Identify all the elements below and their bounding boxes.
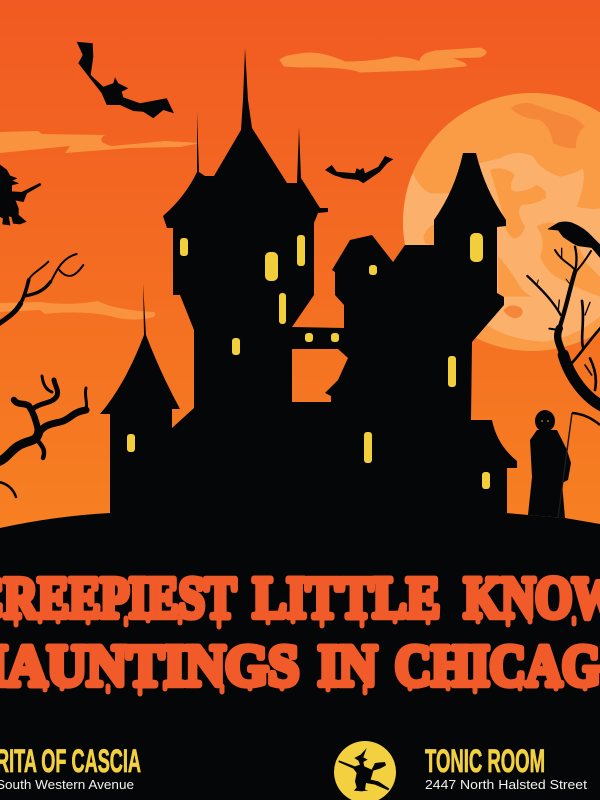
moon mid blobs (490, 168, 546, 238)
reaper eyes (541, 420, 543, 422)
small bat (325, 156, 393, 183)
venue name: RITA OF CASCIA (0, 743, 141, 779)
moon light patches (400, 153, 600, 342)
crow (548, 222, 600, 259)
tree branch: lower left (0, 376, 87, 497)
grim reaper (528, 410, 600, 518)
moon (400, 90, 600, 355)
cloud: lower left (0, 301, 155, 320)
tree: right (527, 247, 600, 407)
reaper scythe (558, 413, 572, 518)
reaper robe (528, 430, 571, 518)
reaper hood (535, 410, 555, 432)
venue: Rita of Cascia (0, 743, 141, 792)
castle windows (127, 233, 490, 489)
title word: in: IN (318, 633, 377, 698)
tree branch: upper left (0, 254, 83, 324)
moon dark patch: top (511, 103, 585, 148)
large bat (77, 42, 174, 118)
title drips (16, 618, 585, 694)
witch on broom (0, 165, 41, 225)
cloud: upper left (0, 131, 200, 153)
venue: Tonic Room (425, 743, 588, 792)
title word: little: LITTLE (253, 565, 440, 630)
venue address: 2447 North Halsted Street (425, 778, 588, 792)
cloud: top right (280, 48, 486, 72)
icon: witch badge (334, 741, 396, 800)
